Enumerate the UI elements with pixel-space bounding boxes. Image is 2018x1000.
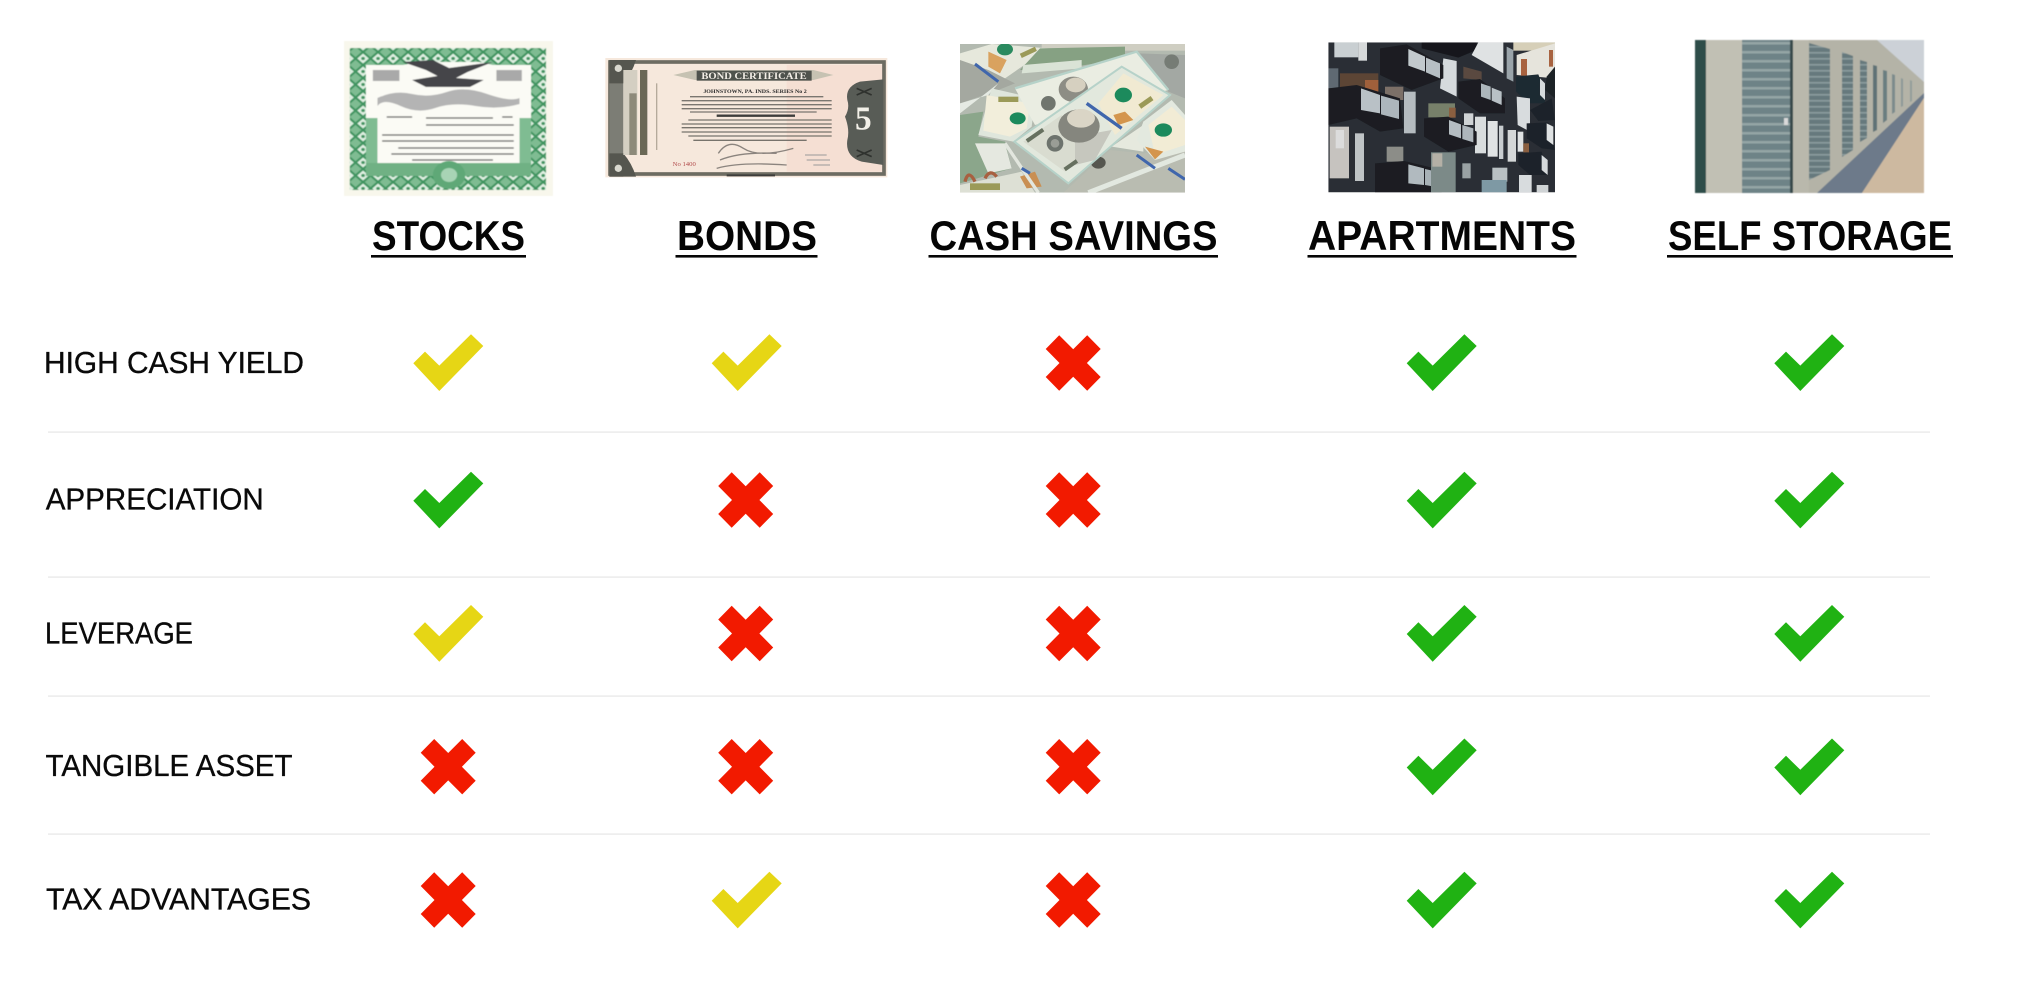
icon: apartments green check — [1407, 738, 1477, 795]
icon: storage green check — [1774, 872, 1844, 928]
heading: apartments: APARTMENTS — [1308, 212, 1576, 259]
icon: stocks green check — [413, 472, 483, 528]
icon: stocks red cross — [421, 739, 476, 794]
icon: apartments green check — [1407, 872, 1477, 928]
heading: bonds: BONDS — [677, 212, 817, 259]
label: tax advantages: TAX ADVANTAGES — [46, 882, 311, 916]
icon: bonds red cross — [718, 606, 773, 661]
image: bond certificate — [605, 58, 887, 177]
label: appreciation: APPRECIATION — [46, 482, 264, 516]
icon: storage green check — [1774, 738, 1844, 795]
panel: bonds column header — [605, 58, 887, 259]
underline: self storage — [1667, 255, 1953, 258]
underline: bonds — [676, 255, 818, 258]
heading: self storage: SELF STORAGE — [1668, 212, 1952, 259]
panel: cash savings column header — [928, 43, 1218, 259]
icon: storage green check — [1774, 472, 1844, 528]
image: bond certificate: BOND CERTIFICATE — [701, 71, 807, 81]
label: high cash yield: HIGH CASH YIELD — [44, 346, 304, 380]
row: tax advantages — [46, 872, 1844, 928]
row: leverage — [45, 605, 1844, 662]
icon: stocks yellow check — [413, 334, 483, 391]
panel: stocks column header — [344, 41, 553, 259]
icon: bonds yellow check — [712, 334, 782, 391]
row: appreciation — [46, 472, 1844, 528]
image: self storage units — [1695, 40, 1924, 193]
underline: apartments — [1308, 255, 1576, 258]
icon: bonds yellow check — [712, 872, 782, 928]
heading: cash savings: CASH SAVINGS — [930, 212, 1218, 259]
icon: bonds red cross — [718, 472, 773, 528]
icon: storage green check — [1774, 605, 1844, 662]
image: apartment building — [1328, 42, 1555, 192]
row: high cash yield — [44, 334, 1844, 391]
icon: apartments green check — [1407, 334, 1477, 391]
icon: bonds red cross — [718, 739, 773, 794]
icon: cash red cross — [1046, 335, 1101, 391]
image: stock certificate — [344, 41, 553, 196]
underline: cash savings — [928, 255, 1218, 258]
image: bond certificate: 5 — [855, 100, 872, 137]
heading: stocks: STOCKS — [372, 212, 525, 259]
icon: storage green check — [1774, 334, 1844, 391]
label: leverage: LEVERAGE — [45, 616, 193, 650]
label: tangible asset: TANGIBLE ASSET — [46, 749, 292, 783]
icon: stocks red cross — [421, 872, 476, 928]
row: tangible asset — [46, 738, 1844, 795]
icon: stocks yellow check — [413, 605, 483, 662]
icon: cash red cross — [1046, 739, 1101, 794]
panel: self storage column header — [1667, 40, 1953, 259]
image: bond certificate: No 1400 — [673, 161, 696, 168]
image: bond certificate: JOHNSTOWN, PA. INDS. SERIES No 2 — [703, 89, 807, 95]
panel: apartments column header — [1308, 42, 1576, 259]
icon: apartments green check — [1407, 472, 1477, 528]
icon: apartments green check — [1407, 605, 1477, 662]
icon: cash red cross — [1046, 606, 1101, 661]
icon: cash red cross — [1046, 872, 1101, 928]
image: pile of dollar bills — [960, 43, 1185, 193]
icon: cash red cross — [1046, 472, 1101, 528]
underline: stocks — [371, 255, 526, 258]
